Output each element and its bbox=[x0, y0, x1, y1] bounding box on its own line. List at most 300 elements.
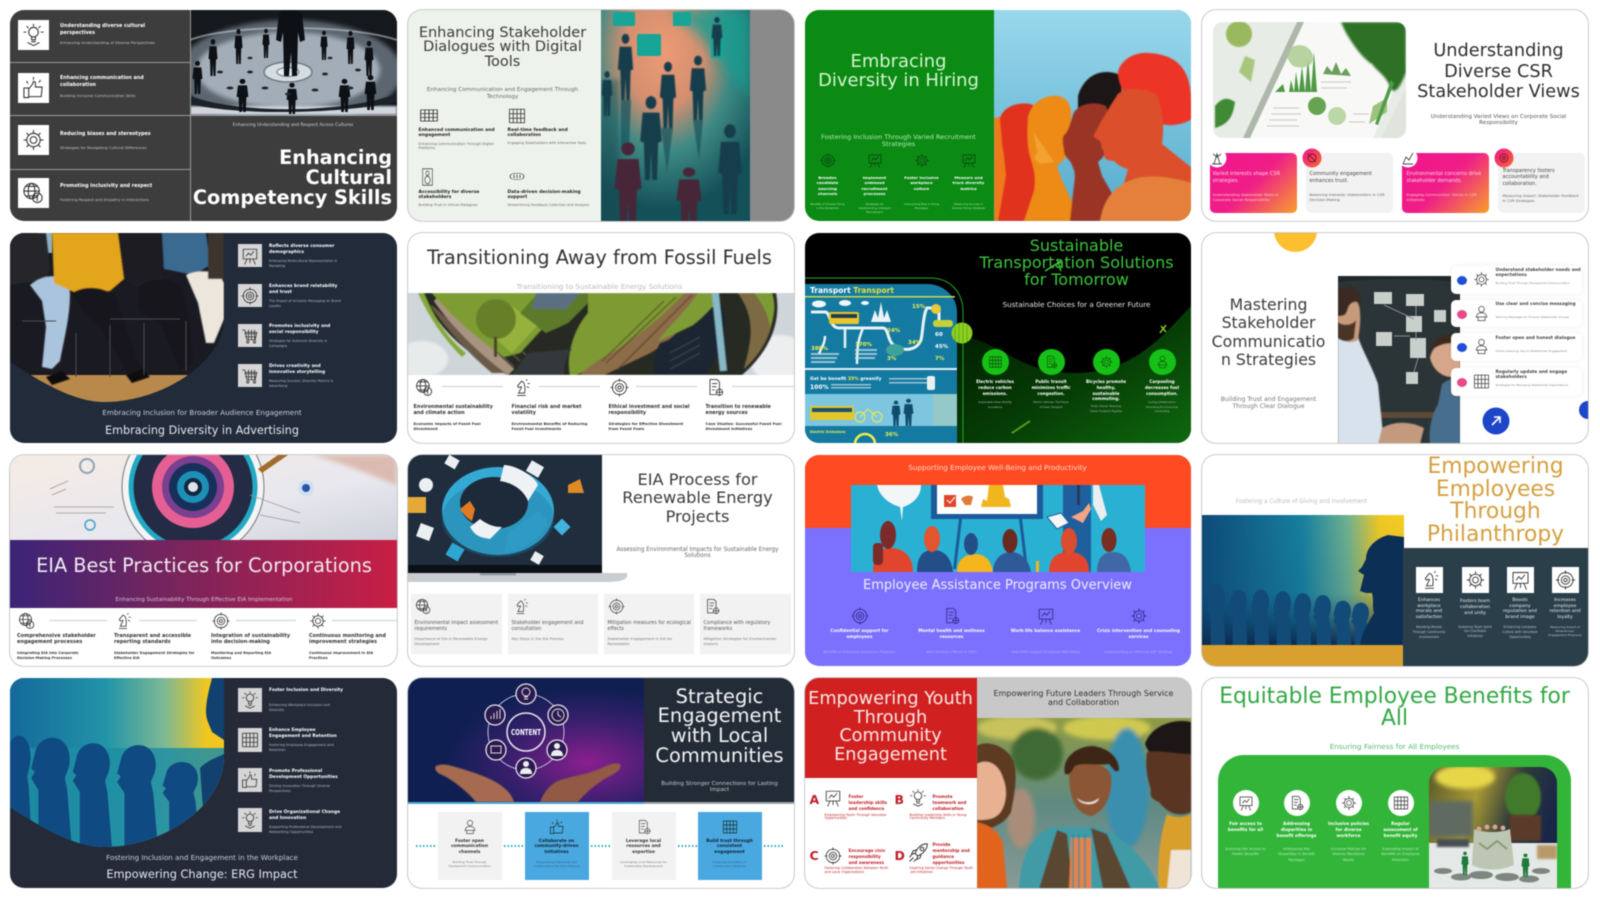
text bbox=[704, 620, 776, 648]
card: Strategic Engagement with Local Communities bbox=[408, 678, 794, 888]
card: Transitioning Away from Fossil Fuels bbox=[408, 232, 794, 443]
text: Initiatives bbox=[1406, 198, 1425, 202]
item: Accessibility bbox=[418, 168, 480, 207]
text: item 3 bbox=[60, 130, 151, 150]
text: item 4: Promoting inclusivity and respect bbox=[60, 182, 152, 188]
icon: speaker bbox=[422, 168, 434, 186]
card: EIA Best Practices for Corporations bbox=[10, 455, 396, 666]
text: Best Services Offered in EAPs bbox=[926, 650, 977, 654]
text: for diverse bbox=[1335, 828, 1362, 832]
text: reporting standards bbox=[114, 639, 171, 645]
text: consultation bbox=[512, 626, 541, 632]
text: Comprehensive stakeholder bbox=[17, 633, 96, 639]
text: Mitigation Strategies for Environmental bbox=[704, 637, 776, 641]
text bbox=[1225, 822, 1266, 858]
item: Electric vehicles bbox=[970, 348, 1020, 422]
infographic panel: 100% bbox=[810, 384, 828, 390]
icon bbox=[414, 598, 432, 615]
icon bbox=[850, 607, 870, 625]
item 3 bbox=[238, 768, 388, 792]
text: expertise bbox=[632, 850, 655, 855]
text: community-driven bbox=[534, 844, 579, 849]
item 3 bbox=[1324, 790, 1374, 874]
text: Development bbox=[414, 642, 439, 646]
title: Employees bbox=[1436, 477, 1555, 502]
text: Enhance Employee bbox=[269, 728, 316, 732]
text: item 2: Building Inclusive Communication Skills bbox=[60, 93, 135, 98]
item 4 bbox=[1376, 790, 1426, 874]
text: via Charitable bbox=[1464, 629, 1486, 633]
subtitle bbox=[1221, 396, 1316, 411]
text: Loyalty bbox=[269, 304, 281, 308]
text bbox=[932, 842, 970, 866]
text: Packages bbox=[1288, 858, 1305, 862]
icon bbox=[462, 818, 478, 834]
text bbox=[1413, 598, 1445, 639]
subtitle: Responsibility bbox=[1479, 120, 1518, 126]
item 4 bbox=[238, 808, 388, 832]
item 1 bbox=[1416, 567, 1443, 657]
title bbox=[1212, 296, 1325, 370]
icon: radio bbox=[508, 108, 526, 124]
text: company bbox=[1509, 604, 1531, 609]
text: sourcing bbox=[818, 186, 837, 191]
text: Integration of sustainability bbox=[211, 633, 290, 639]
item: Mental health bbox=[912, 605, 992, 659]
infographic panel: 34% bbox=[908, 340, 921, 346]
list: four benefits bbox=[238, 688, 388, 834]
text: resources bbox=[940, 635, 963, 640]
text: in CSR Strategies bbox=[1502, 199, 1535, 203]
icon bbox=[1038, 348, 1064, 374]
text: Embracing Multicultural Representation in bbox=[269, 258, 337, 262]
title: Engagement bbox=[658, 704, 781, 727]
text: Enhanced communication and bbox=[418, 128, 495, 133]
text: commuting. bbox=[1092, 396, 1120, 401]
text: guidance bbox=[932, 854, 954, 858]
card: Understanding Diverse CSR Stakeholder Views bbox=[1202, 10, 1588, 220]
note: Opportunities bbox=[824, 816, 847, 820]
text: Promote Professional bbox=[269, 768, 322, 774]
text bbox=[269, 728, 337, 752]
text: processes bbox=[864, 191, 885, 196]
title bbox=[818, 51, 979, 90]
title: Stakeholder Views bbox=[1417, 82, 1580, 102]
text: communication bbox=[451, 844, 488, 849]
icon bbox=[238, 688, 262, 712]
text: Encourage civic bbox=[848, 848, 885, 852]
subtitle: Supporting Employee Well-Being and Productivity bbox=[908, 463, 1087, 472]
item: Carpooling bbox=[1138, 348, 1188, 422]
title: Dialogues with Digital bbox=[423, 39, 582, 55]
text: Carpooling bbox=[1149, 379, 1175, 384]
text: Initiatives bbox=[1467, 634, 1483, 638]
illustration: presentation to audience bbox=[850, 485, 1144, 572]
text: healthy, bbox=[1097, 385, 1115, 390]
text: opportunities bbox=[932, 860, 964, 864]
item 2 bbox=[1451, 300, 1582, 326]
text: item 1 bbox=[60, 22, 155, 45]
letter: C bbox=[810, 848, 819, 862]
letter: B bbox=[894, 792, 904, 806]
text: collaboration. bbox=[1502, 180, 1537, 186]
text: responsibility bbox=[608, 410, 646, 416]
title bbox=[1427, 456, 1564, 547]
text: Measure and bbox=[954, 174, 983, 180]
text: Advertising bbox=[269, 384, 287, 388]
card: Empowering Employees Through Philanthropy bbox=[1202, 455, 1588, 666]
text: decreases fuel bbox=[1145, 385, 1179, 390]
box 1 bbox=[438, 812, 502, 880]
text: brand image bbox=[1505, 615, 1535, 620]
text: Sustainable Development bbox=[624, 864, 663, 868]
text bbox=[534, 838, 579, 869]
card: EIA Process for Renewable Energy Projects bbox=[408, 455, 794, 666]
card: Sustainable Transportation Solutions bbox=[804, 232, 1191, 443]
infographic panel: 36% bbox=[884, 432, 898, 438]
text: Leveraging Local Resources for bbox=[620, 860, 667, 864]
timeline: four items bbox=[10, 610, 397, 664]
timeline: four items bbox=[408, 376, 794, 438]
text: Supporting Professional Development and bbox=[269, 824, 341, 828]
infographic panel bbox=[804, 276, 970, 444]
text bbox=[1458, 599, 1492, 639]
dot bbox=[1457, 342, 1467, 352]
title: Communicatio bbox=[1212, 332, 1325, 351]
text: Diverse Hiring Initiatives bbox=[952, 206, 985, 210]
text: Renewables bbox=[608, 642, 630, 646]
text: Campaigns bbox=[269, 344, 287, 348]
text: How EAPs Support Employee Well-being bbox=[1012, 650, 1079, 654]
item: Crisis intervention bbox=[1098, 605, 1178, 659]
text: Transparent and accessible bbox=[114, 633, 191, 639]
text: and Innovation bbox=[269, 816, 306, 820]
item 4 bbox=[706, 376, 794, 438]
decor: striped green ball bbox=[950, 322, 972, 344]
text: Carbon Footprint Together bbox=[1090, 410, 1122, 413]
letter: A bbox=[810, 792, 819, 806]
text: Through Community bbox=[1413, 630, 1445, 634]
text bbox=[952, 174, 985, 210]
card: Employee Assistance Programs Overview bbox=[804, 455, 1191, 666]
icon bbox=[908, 788, 926, 808]
text: Overcoming Bias in Hiring bbox=[904, 202, 939, 206]
text: item 2: Enhancing communication and bbox=[60, 74, 144, 80]
text: Case Studies: Successful Fossil Fuel bbox=[706, 422, 782, 426]
photo: content cycle held by hands: CONTENT bbox=[510, 728, 541, 736]
text: Evaluating Impact of bbox=[1382, 846, 1419, 850]
title bbox=[193, 146, 392, 209]
title: Embracing bbox=[851, 51, 946, 72]
text: Streamlining Feedback Collection and Analysis bbox=[508, 203, 589, 207]
text bbox=[269, 810, 341, 834]
item: Broaden candidate sourcing bbox=[810, 153, 845, 210]
banner bbox=[10, 540, 397, 608]
text: Crisis intervention and counseling bbox=[1097, 629, 1180, 634]
text: Commuting bbox=[1155, 410, 1169, 413]
text: sustainable bbox=[1092, 391, 1120, 396]
item 2 bbox=[114, 610, 204, 664]
text: Stakeholder Engagement Strategies for bbox=[114, 651, 195, 655]
text: Benefits on Employee bbox=[1381, 852, 1420, 856]
text: Foster inclusive bbox=[904, 174, 939, 180]
item: Public transit bbox=[1026, 348, 1076, 422]
text: and confidence bbox=[848, 806, 884, 810]
text: Health Benefits bbox=[1232, 852, 1259, 856]
note: Building Leadership Skills in Young bbox=[910, 812, 967, 816]
text: Opportunities bbox=[1509, 635, 1531, 639]
subtitle: Impact bbox=[710, 787, 729, 793]
text bbox=[269, 768, 338, 794]
subtitle bbox=[821, 132, 976, 148]
text: Ethical investment and social bbox=[608, 404, 690, 410]
text: Transition to renewable bbox=[706, 404, 771, 410]
text: satisfaction bbox=[1416, 615, 1442, 620]
text bbox=[114, 633, 195, 661]
text: unbiased bbox=[864, 180, 885, 185]
text bbox=[848, 794, 887, 812]
text: item 4: Fostering Respect and Empathy in Interactions bbox=[60, 196, 149, 202]
photo: content cycle held by hands bbox=[408, 678, 644, 802]
text: The Impact of Inclusive Messaging on Brand bbox=[269, 298, 341, 302]
card: Empowering Youth Through Community Engagement bbox=[804, 678, 1191, 888]
connector and text: Divestment bbox=[414, 427, 438, 431]
box 2 bbox=[508, 594, 598, 654]
text: Implementing an Effective EAP Strategy bbox=[1105, 650, 1172, 654]
photo: seated people in blob bbox=[10, 232, 225, 403]
note: and Local Organizations bbox=[824, 870, 864, 874]
item 2 bbox=[512, 376, 602, 438]
icon bbox=[1284, 790, 1310, 816]
text: Engagement and Retention bbox=[269, 734, 337, 738]
photo: team at chalkboard bbox=[1338, 276, 1460, 444]
icon: brain chip bbox=[509, 172, 525, 180]
icon bbox=[704, 598, 720, 615]
text: Compliance with regulatory bbox=[704, 620, 770, 626]
text: Impacts bbox=[704, 642, 718, 646]
icon bbox=[212, 612, 230, 630]
box 3 bbox=[612, 812, 676, 880]
dark panel bbox=[1403, 548, 1588, 666]
text: Increases bbox=[1554, 598, 1576, 603]
subtitle: Solutions bbox=[684, 553, 711, 559]
subtitle: Sustainable Choices for a Greener Future bbox=[1003, 300, 1150, 308]
title: All bbox=[1381, 706, 1408, 731]
text: Confidential support for bbox=[830, 629, 889, 634]
title: Tools bbox=[485, 54, 520, 70]
text: Enhances brand relatability bbox=[269, 284, 337, 288]
icon bbox=[238, 808, 262, 832]
icon: graduate globe bbox=[18, 178, 49, 208]
item: Work-life balance bbox=[1006, 605, 1086, 659]
text: Implement bbox=[863, 174, 886, 180]
option D bbox=[894, 840, 974, 882]
text: Use clear and concise messaging bbox=[1496, 302, 1576, 307]
text: Engaging Communities: Voices in CSR bbox=[1406, 193, 1477, 197]
text: Benefits of Diverse Hiring bbox=[810, 202, 845, 206]
icon bbox=[1232, 790, 1258, 816]
text bbox=[1496, 336, 1575, 354]
dot bbox=[1457, 378, 1467, 386]
letter: D bbox=[894, 848, 905, 862]
item 4 bbox=[238, 364, 388, 388]
text: services bbox=[1129, 635, 1148, 640]
title: Community bbox=[839, 726, 942, 746]
icon: chart board bbox=[962, 154, 976, 168]
box 4 bbox=[1498, 153, 1585, 213]
text bbox=[1310, 170, 1385, 203]
text bbox=[823, 629, 896, 654]
option B bbox=[894, 790, 974, 824]
text: Regularly update and engage bbox=[1496, 370, 1567, 374]
item: Confidential support bbox=[820, 605, 900, 659]
title: Enhancing Stakeholder bbox=[419, 24, 586, 40]
text: collaboration bbox=[1460, 605, 1490, 610]
text: Effective EIA bbox=[114, 656, 140, 660]
text: channels bbox=[818, 191, 837, 196]
icon bbox=[982, 348, 1008, 374]
text: from Fossil Fuels bbox=[608, 427, 644, 431]
right title panel bbox=[644, 678, 794, 802]
icon bbox=[1148, 348, 1176, 374]
connector and text: Environmental sustainability bbox=[414, 404, 493, 410]
icon bbox=[238, 728, 262, 752]
text: social responsibility bbox=[269, 330, 319, 334]
text: reputation and bbox=[1503, 609, 1537, 614]
text bbox=[1212, 170, 1280, 203]
text bbox=[904, 174, 940, 210]
connector and text: and climate action bbox=[414, 410, 465, 416]
infographic panel: 3% bbox=[886, 356, 896, 362]
background green wave bbox=[804, 232, 1192, 444]
text: leadership skills bbox=[848, 800, 887, 804]
text: Enhancing Company bbox=[1504, 625, 1536, 629]
text: Fostering Employee Engagement and bbox=[269, 742, 334, 746]
text: reduce carbon bbox=[978, 385, 1012, 390]
subtitle: Transitioning to Sustainable Energy Solutions bbox=[517, 282, 682, 290]
title: EIA Process for bbox=[637, 470, 758, 488]
text: Addressing bbox=[1283, 822, 1310, 826]
text bbox=[1502, 598, 1538, 639]
title: Cultural bbox=[305, 166, 392, 189]
photo: silhouettes with speech bubbles bbox=[600, 9, 751, 222]
item 3 bbox=[1507, 567, 1534, 657]
infographic panel: 380% bbox=[810, 346, 828, 352]
text: Strategies for Managing Stakeholder Expectations bbox=[1496, 383, 1568, 387]
text: Continuous monitoring and bbox=[309, 633, 386, 639]
text bbox=[1381, 822, 1420, 864]
subtitle: Understanding Varied Views on Corporate Social bbox=[1431, 114, 1566, 120]
text: Strategies for bbox=[865, 202, 884, 206]
subtitle: Building Trust and Engagement bbox=[1221, 396, 1316, 402]
header band bbox=[804, 455, 1192, 528]
text: loyalty bbox=[1557, 615, 1573, 620]
item: Measure diversity metrics bbox=[952, 154, 986, 210]
note bbox=[824, 814, 887, 821]
subtitle: Enhancing Sustainability Through Effective EIA Implementation bbox=[115, 597, 293, 603]
box 4 bbox=[698, 812, 762, 880]
infographic panel: 60 bbox=[934, 332, 942, 338]
text: stakeholders bbox=[1496, 375, 1527, 380]
text: Collaborative Decision-Making bbox=[534, 864, 579, 868]
text: improvement strategies bbox=[309, 639, 377, 645]
item 2 bbox=[1272, 790, 1322, 874]
text: Foster bbox=[848, 794, 863, 798]
icon bbox=[114, 612, 132, 630]
text: Accessibility for diverse bbox=[418, 190, 479, 194]
text: Key Steps in the EIA Process bbox=[512, 637, 564, 641]
text bbox=[309, 633, 386, 661]
text: Enhances bbox=[1418, 598, 1440, 603]
item: Data-driven decision-making bbox=[507, 172, 590, 207]
option C bbox=[810, 846, 890, 882]
text: employees bbox=[846, 635, 873, 640]
item 3 bbox=[1451, 332, 1582, 360]
text: Provide bbox=[932, 842, 951, 846]
text: Measuring Success in bbox=[954, 202, 983, 206]
text: benefit offerings bbox=[1277, 834, 1316, 838]
title bbox=[1417, 41, 1580, 102]
text: Philanthropic bbox=[1556, 629, 1574, 633]
text: Engaging Stakeholders with Interactive Tools bbox=[508, 141, 586, 145]
title: Diverse CSR bbox=[1444, 62, 1553, 82]
note: Community Members bbox=[910, 816, 945, 820]
title: for Tomorrow bbox=[1024, 270, 1129, 289]
text bbox=[1502, 168, 1579, 204]
dot bbox=[1457, 310, 1467, 318]
title: Mastering bbox=[1230, 294, 1307, 314]
divider strip bbox=[408, 802, 794, 804]
icon bbox=[238, 768, 262, 792]
item: Enhancing communication and collaboration bbox=[17, 72, 144, 104]
infographic panel: 15% bbox=[912, 304, 925, 310]
text: Decision-Making bbox=[1310, 198, 1340, 202]
text: Marketing bbox=[269, 264, 285, 268]
box 3 bbox=[604, 594, 694, 654]
text: Driving Innovation Through Diverse bbox=[269, 784, 330, 788]
text: accountability and bbox=[1502, 174, 1549, 180]
title: Transportation Solutions bbox=[979, 253, 1174, 272]
text: item 4 bbox=[60, 182, 153, 202]
text: responsibility bbox=[848, 854, 881, 858]
icon bbox=[512, 378, 530, 396]
title: Empowering Youth bbox=[808, 689, 973, 709]
title: Employee Assistance Programs Overview bbox=[863, 578, 1132, 593]
subtitle: Fostering a Culture of Giving and Involvement bbox=[1236, 499, 1367, 505]
icon bbox=[824, 788, 842, 808]
icon: blue arrow button bbox=[1482, 406, 1510, 434]
text: Drives creativity and bbox=[269, 364, 321, 368]
text: Building Trust in Virtual Dialogues bbox=[418, 203, 478, 207]
text bbox=[1328, 822, 1369, 864]
icon: light bulb bbox=[18, 20, 49, 50]
divider lines bbox=[10, 10, 398, 222]
text bbox=[269, 324, 330, 348]
subtitle bbox=[994, 689, 1173, 708]
text bbox=[1032, 379, 1070, 410]
photo: colourful profiles bbox=[993, 9, 1192, 222]
text: Enhancing Workplace Inclusion and bbox=[269, 702, 330, 706]
text: Promotes inclusivity and bbox=[269, 324, 330, 328]
title: Transitioning Away from Fossil Fuels bbox=[427, 246, 772, 268]
item: Bicycles promote bbox=[1082, 348, 1132, 422]
text: and awareness bbox=[848, 860, 884, 864]
text: Culture with Volunteer bbox=[1502, 630, 1538, 634]
text: Broaden bbox=[818, 174, 837, 180]
text: support bbox=[508, 195, 527, 200]
text: emissions. bbox=[983, 391, 1007, 396]
subtitle bbox=[426, 86, 578, 100]
